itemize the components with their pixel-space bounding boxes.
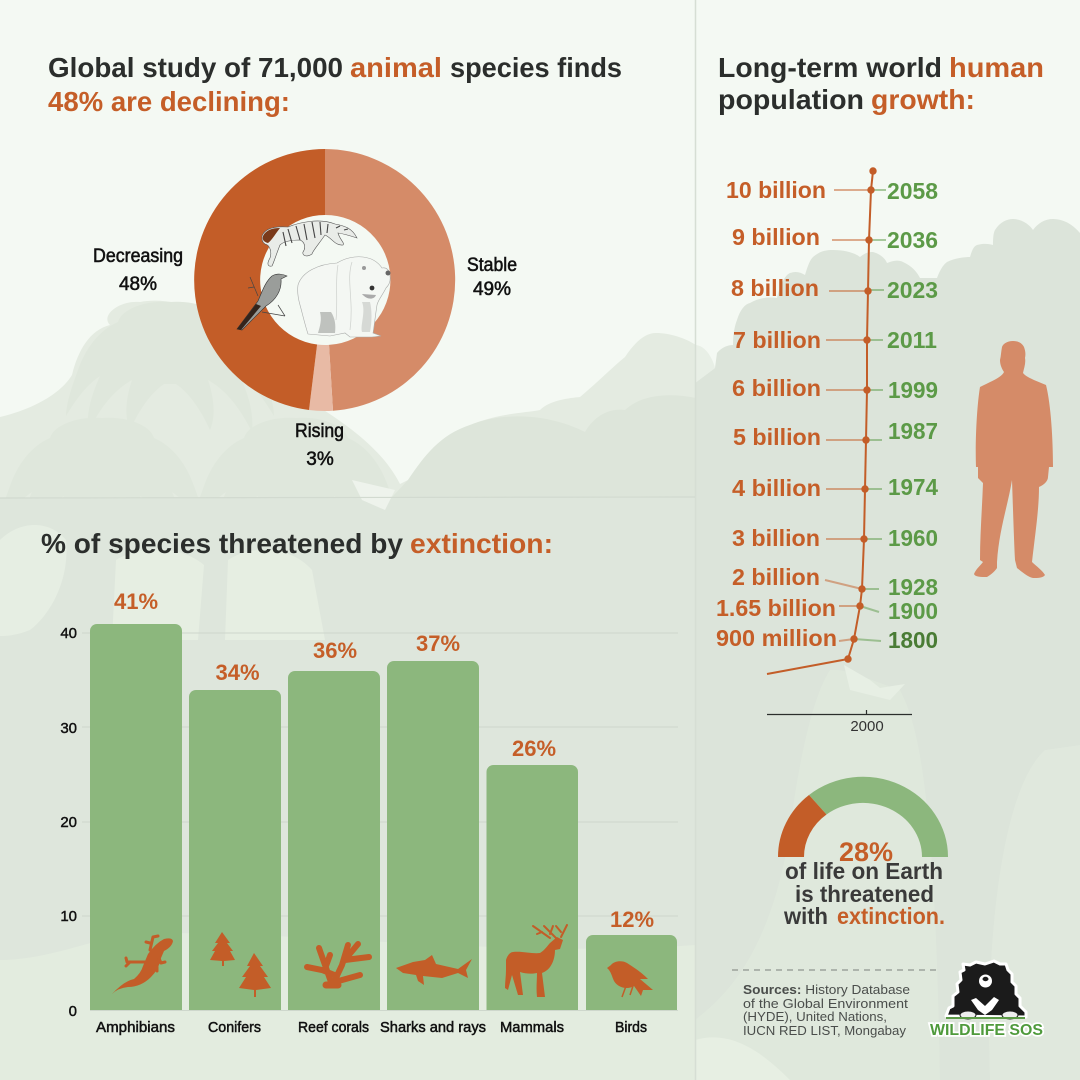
bar values: 37% [416, 631, 460, 656]
category labels: Reef corals [298, 1019, 369, 1036]
gridlines [82, 633, 678, 1010]
population labels: 6 billion [732, 375, 821, 401]
heading: species threatened: % of species threatened by [41, 528, 403, 559]
year labels: 1928 [888, 574, 938, 600]
bar values: 36% [313, 638, 357, 663]
label: decreasing 48%: 48% [119, 274, 157, 295]
gauge arc: remaining green [809, 777, 948, 857]
heading: population growth: population [718, 84, 864, 115]
bar: birds [586, 935, 677, 1010]
population labels: 5 billion [733, 424, 821, 450]
tiger sketch [262, 221, 357, 266]
heading: global study: Global study of 71,000 [48, 52, 343, 83]
bar values [114, 589, 654, 932]
heading: species threatened: extinction: [410, 528, 553, 559]
year labels: 2011 [887, 327, 937, 353]
icon: bird [607, 961, 653, 997]
connectors to population labels [825, 190, 871, 641]
x axis [767, 710, 912, 735]
gauge text: extinction. [837, 903, 945, 929]
icon: lizard [112, 936, 173, 994]
year labels: 2036 [887, 227, 938, 253]
sources [732, 970, 937, 1038]
bar values: 41% [114, 589, 158, 614]
icon: human silhouette [974, 341, 1053, 578]
population labels: 4 billion [732, 475, 821, 501]
population labels: 8 billion [731, 275, 819, 301]
population labels: 9 billion [732, 224, 820, 250]
year labels: 1900 [888, 598, 938, 624]
donut chart: species trends [194, 149, 455, 411]
sources: IUCN RED LIST, Mongabay [743, 1023, 906, 1038]
year labels [887, 178, 938, 653]
segment: decreasing 48% [194, 149, 325, 410]
heading: global study [48, 52, 622, 117]
year labels: 2023 [887, 277, 938, 303]
population labels: 7 billion [733, 327, 821, 353]
heading: global study: 48% are declining: [48, 86, 290, 117]
y axis labels: 0 [69, 1003, 77, 1020]
heading: population growth: human [949, 52, 1044, 83]
connectors to years [854, 190, 886, 641]
gauge: 28% of life threatened [778, 777, 948, 929]
category labels: Birds [615, 1019, 647, 1036]
y axis labels [60, 625, 77, 1020]
bar: sharks and rays [387, 661, 479, 1010]
year labels: 1800 [888, 627, 938, 653]
category labels: Conifers [208, 1019, 261, 1036]
sources: Sources: History Database [743, 982, 910, 997]
bar values: 26% [512, 736, 556, 761]
x axis: 2000 [850, 718, 884, 735]
segment: stable 49% [325, 149, 455, 411]
bar chart: threatened species [60, 589, 678, 1036]
year labels: 1999 [888, 377, 938, 403]
y axis labels: 40 [60, 625, 77, 642]
year labels: 2058 [887, 178, 938, 204]
label: rising 3%: Rising [295, 421, 344, 442]
label: stable 49% [467, 255, 517, 300]
gauge text: is threatened [795, 881, 934, 907]
population labels: 1.65 billion [716, 595, 836, 621]
heading: global study: species finds [450, 52, 622, 83]
population labels: 900 million [716, 625, 837, 651]
label: decreasing 48%: Decreasing [93, 246, 183, 267]
logo wordmark: WILDLIFE SOS [930, 1022, 1043, 1039]
line chart: world population timeline [716, 167, 938, 735]
y axis labels: 20 [60, 814, 77, 831]
heading: population growth [718, 52, 1044, 115]
label: decreasing 48% [93, 246, 183, 295]
gauge text: 28% [839, 837, 893, 867]
population labels [716, 177, 837, 651]
heading: global study: animal [350, 52, 442, 83]
category labels [96, 1019, 647, 1036]
bird sketch [237, 274, 287, 330]
gauge text [783, 837, 945, 929]
logo: wildlife sos [930, 961, 1043, 1039]
population labels: 3 billion [732, 525, 820, 551]
category labels: Sharks and rays [380, 1019, 486, 1036]
label: stable 49%: Stable [467, 255, 517, 276]
year labels: 1974 [888, 474, 938, 500]
heading: population growth: growth: [871, 84, 975, 115]
data points [844, 167, 877, 663]
year labels: 1960 [888, 525, 938, 551]
y axis labels: 30 [60, 720, 77, 737]
bar: reef corals [288, 671, 380, 1010]
label: stable 49%: 49% [473, 279, 511, 300]
population labels: 2 billion [732, 564, 820, 590]
bear sketch [298, 257, 390, 337]
label: rising 3% [295, 421, 344, 470]
sources: (HYDE), United Nations, [743, 1009, 887, 1024]
sources: of the Global Environment [743, 996, 908, 1011]
label: rising 3%: 3% [306, 449, 334, 470]
category labels: Amphibians [96, 1019, 175, 1036]
bar: conifers [189, 690, 281, 1010]
category labels: Mammals [500, 1019, 564, 1036]
segment: rising 3% [309, 344, 333, 411]
bar: amphibians [90, 624, 182, 1010]
bar values: 12% [610, 907, 654, 932]
gauge arc: threatened orange [778, 795, 826, 857]
illustration: tiger, bear and bird [237, 221, 390, 337]
icon: coral [307, 944, 369, 985]
gauge text: with [783, 903, 828, 929]
bar values: 34% [215, 660, 260, 685]
icon: conifer trees [210, 932, 271, 997]
bear mark [946, 961, 1026, 1019]
heading: population growth: Long-term world [718, 52, 942, 83]
population labels: 10 billion [726, 177, 826, 203]
icon: shark [396, 955, 472, 985]
bar: mammals [486, 765, 578, 1010]
y axis labels: 10 [60, 908, 77, 925]
icon: deer [505, 925, 567, 997]
population curve [767, 171, 873, 674]
year labels: 1987 [888, 418, 938, 444]
gauge text: of life on Earth [785, 858, 943, 884]
